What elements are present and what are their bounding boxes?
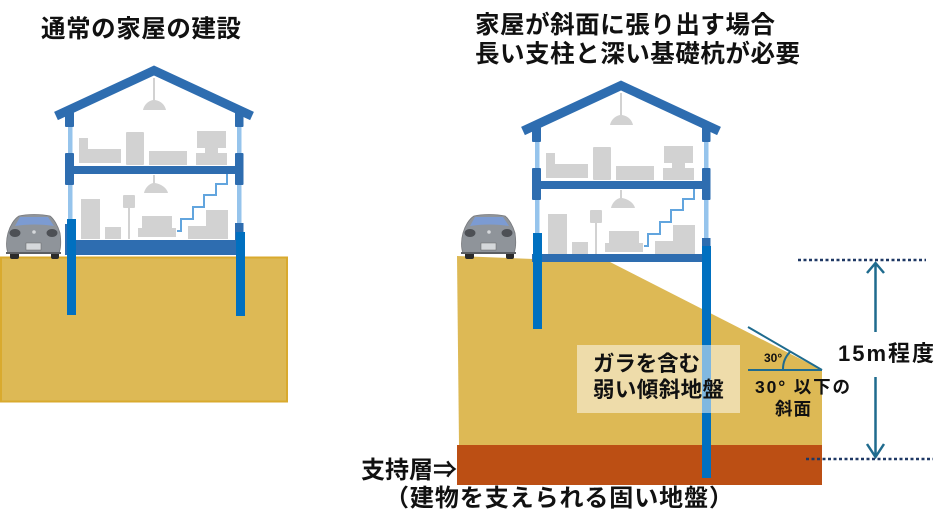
left house [56, 70, 252, 255]
bearing layer label: 支持層⇒ [361, 457, 457, 484]
left house piles [67, 219, 245, 316]
height dotted lines [798, 260, 933, 459]
right house [523, 86, 719, 262]
callout: weak sloped ground [577, 345, 740, 413]
title: hillside house [475, 10, 800, 68]
bearing layer label: （建物を支えられる固い地盤） [385, 485, 733, 512]
right house piles [533, 233, 711, 478]
slope label: 斜面 [775, 399, 811, 419]
title: hillside house: 長い支柱と深い基礎杭が必要 [475, 39, 800, 68]
height label: 15m程度 [838, 341, 934, 366]
bearing layer [457, 445, 822, 485]
title: hillside house: 家屋が斜面に張り出す場合 [475, 10, 776, 39]
right sloped ground [457, 256, 822, 445]
right car [461, 214, 516, 259]
callout: weak sloped ground: 弱い傾斜地盤 [593, 378, 724, 402]
title: normal house: 通常の家屋の建設 [41, 15, 241, 43]
small angle label: 30° [764, 351, 782, 365]
left car [6, 214, 61, 259]
slope label [755, 377, 850, 419]
height arrow [867, 263, 884, 457]
callout: weak sloped ground: ガラを含む [593, 352, 700, 376]
left ground [1, 258, 287, 402]
slope label: 30° 以下の [755, 377, 850, 397]
bearing layer label [361, 457, 733, 512]
slope angle marker [748, 327, 822, 370]
